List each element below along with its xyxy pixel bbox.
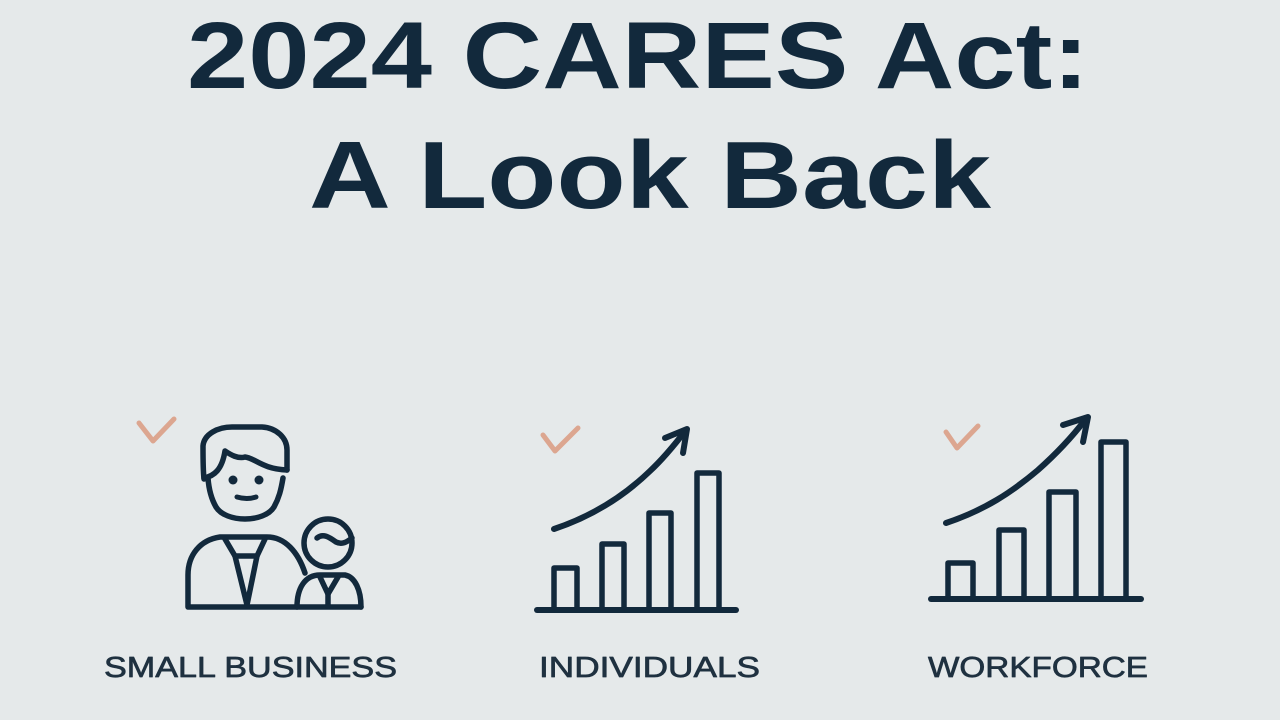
icon: check small business — [139, 419, 174, 441]
icon: adult and child — [188, 427, 361, 607]
label: workforce: WORKFORCE — [928, 652, 1148, 684]
icon: check workforce — [946, 426, 978, 448]
panel: small business — [104, 419, 397, 684]
panel: workforce — [928, 417, 1148, 684]
panel: individuals — [537, 428, 760, 684]
title: 2024 CARES Act: — [187, 3, 1089, 109]
title: A Look Back — [309, 122, 992, 229]
icon: check individuals — [543, 428, 578, 451]
label: individuals: INDIVIDUALS — [539, 652, 760, 684]
chart: rising bars individuals — [537, 429, 736, 610]
label: small business: SMALL BUSINESS — [104, 652, 397, 684]
chart: rising bars workforce — [931, 417, 1141, 599]
title — [187, 3, 1089, 229]
